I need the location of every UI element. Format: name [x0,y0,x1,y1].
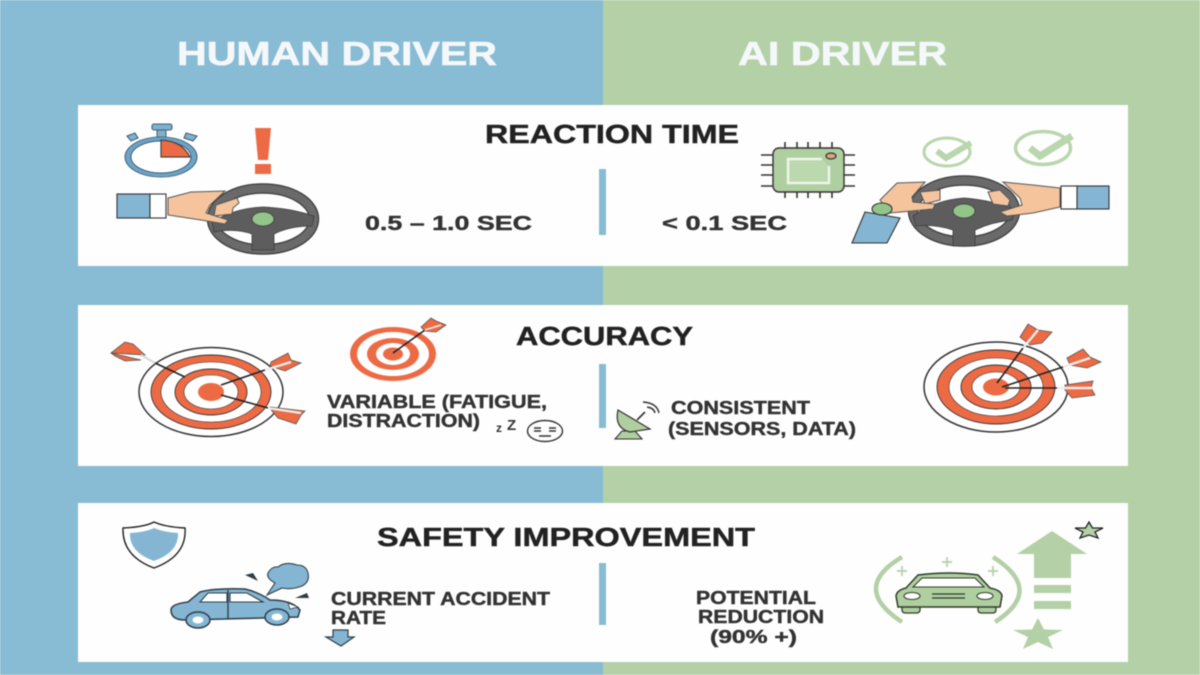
text: consistent sensors data: CONSISTENT [671,398,810,418]
icon: crashed car [171,563,308,628]
icon: stopwatch [124,124,198,178]
icon: AI chip [761,142,855,198]
panel: safety improvement [78,503,1128,662]
text: consistent sensors data: (SENSORS, DATA) [668,419,856,439]
icon: sleeping face [496,417,562,442]
icon: shield [123,522,185,568]
icon: outlined star [1075,522,1103,538]
icon: scattered target [111,342,305,436]
icon: satellite dish [615,402,659,439]
text: potential reduction: REDUCTION [698,607,824,627]
text: variable fatigue distraction [327,392,547,431]
heading: human driver: HUMAN DRIVER [177,35,497,72]
heading: reaction time: REACTION TIME [485,119,739,149]
right background: AI side [603,0,1200,675]
icon: upward arrow with bars [1017,531,1087,609]
heading: accuracy: ACCURACY [516,321,693,351]
icon: smoke cloud [267,563,308,595]
icon: small target with arrow [350,318,446,381]
icon: check mark one [924,138,971,166]
panel: accuracy [78,305,1128,466]
divider: reaction time [599,169,606,235]
icon: AI hands on steering wheel [852,180,1109,246]
icon: sleeping face: Z [507,417,516,434]
icon: exclamation mark [255,128,271,174]
text: potential reduction [696,588,824,647]
text: potential reduction: (90% +) [710,627,797,647]
icon: protected car [876,557,1020,622]
icon: down arrow [326,630,354,646]
text: variable fatigue distraction: VARIABLE (FATIGUE, [327,392,547,412]
panel: reaction time [78,105,1128,266]
icon: sleeping face: z [496,421,502,435]
text: current accident rate: CURRENT ACCIDENT [331,589,550,609]
value: AI reaction time: < 0.1 SEC [662,213,787,235]
icon: human hand on steering wheel [117,188,314,250]
heading: AI driver: AI DRIVER [738,35,947,72]
divider: safety improvement [599,563,606,625]
text: current accident rate [331,589,550,628]
divider: accuracy [599,364,606,428]
text: variable fatigue distraction: DISTRACTION) [327,411,480,431]
icon: check mark two [1016,132,1072,164]
heading: safety improvement: SAFETY IMPROVEMENT [377,522,755,552]
icon: grouped target [924,324,1101,432]
text: potential reduction: POTENTIAL [696,588,816,608]
text: current accident rate: RATE [331,608,386,628]
icon: filled star [1013,618,1063,649]
text: consistent sensors data [668,398,856,439]
icon: crash sparks [245,573,309,598]
value: human reaction time: 0.5 – 1.0 SEC [365,213,532,235]
left background: human side [0,0,603,675]
